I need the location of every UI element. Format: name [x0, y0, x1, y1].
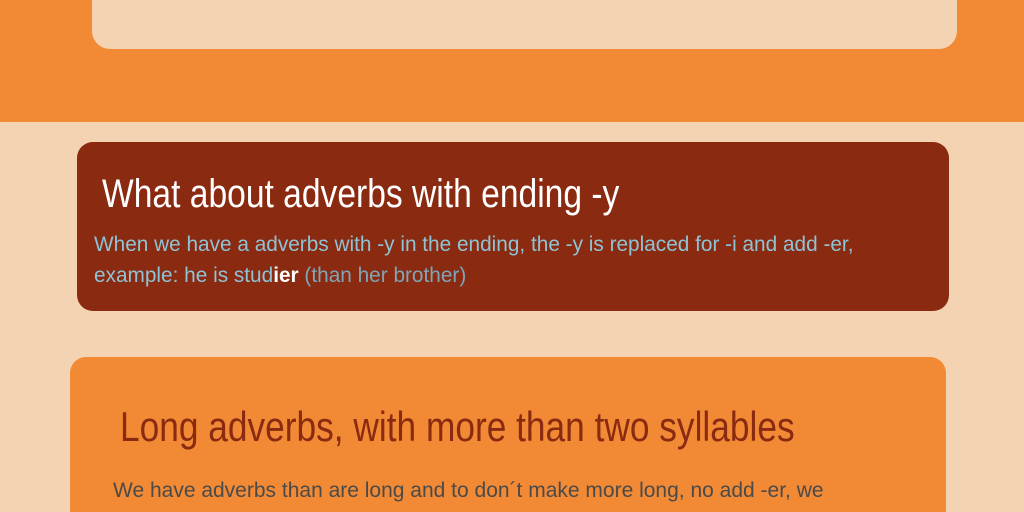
top orange band — [0, 0, 1024, 122]
panel: top cream card — [92, 0, 957, 49]
panel: long adverbs — [70, 357, 946, 512]
text block: example: he is studier (than her brother) — [94, 264, 466, 287]
text block: When we have a adverbs with -y in the ending, the -y is replaced for -i and add -er, — [94, 233, 854, 256]
heading: What about adverbs with ending -y — [102, 172, 619, 216]
panel: adverbs ending -y — [77, 142, 949, 311]
text block — [113, 479, 824, 512]
text block — [94, 233, 854, 287]
heading: Long adverbs, with more than two syllables — [120, 403, 795, 450]
text block: We have adverbs than are long and to don´t make more long, no add -er, we — [113, 479, 824, 502]
